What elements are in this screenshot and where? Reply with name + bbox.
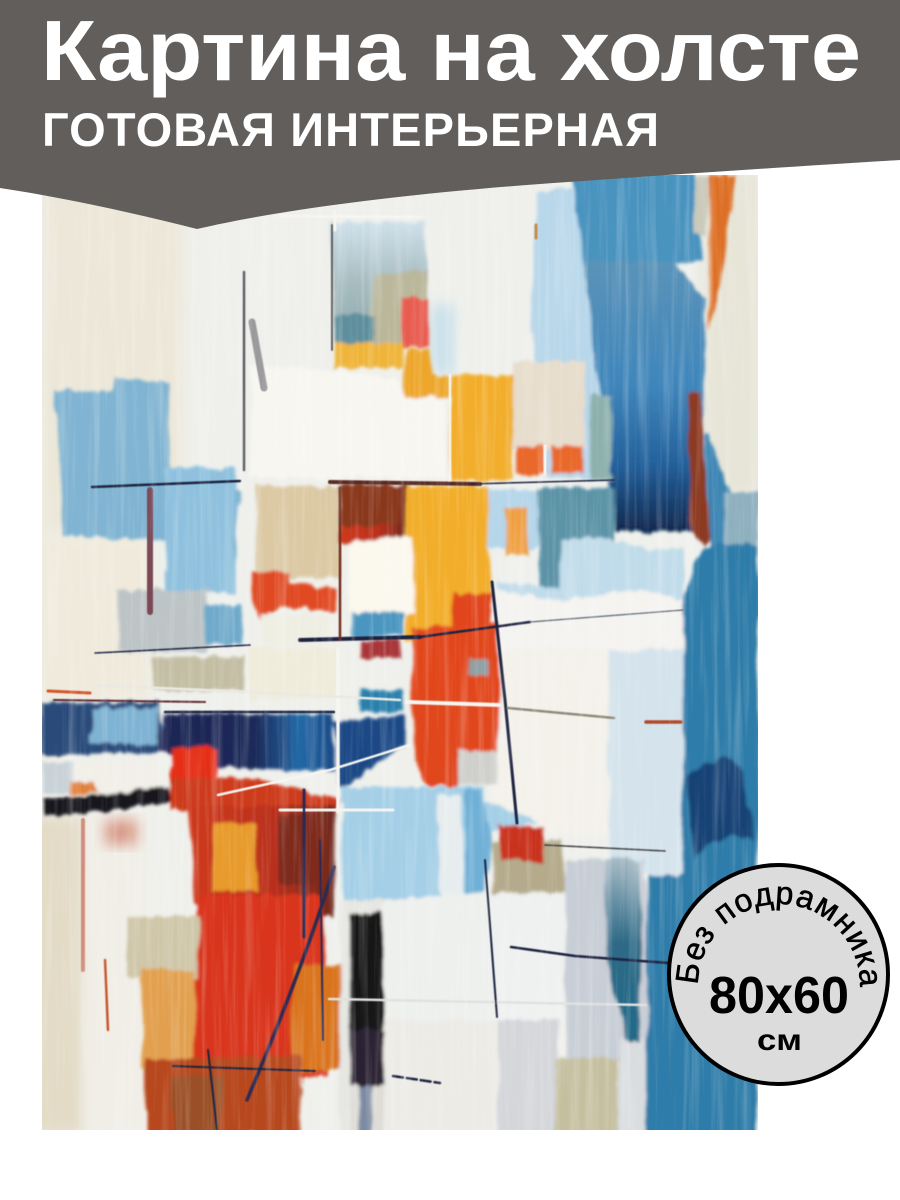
central lower blocks <box>251 485 614 640</box>
grey and red strokes <box>48 225 681 1030</box>
black vertical block <box>350 913 384 1135</box>
left grey patches <box>118 590 402 698</box>
lower right greys and teal <box>380 857 646 1135</box>
central sand and yellow <box>451 362 585 481</box>
navy horizontal band <box>42 690 404 790</box>
white scratches <box>152 219 648 1007</box>
central red block <box>412 622 499 787</box>
large white block <box>251 365 446 478</box>
right blue field <box>644 544 758 1135</box>
central pale blue block <box>340 787 540 1135</box>
subtitle: ГОТОВАЯ ИНТЕРЬЕРНАЯ <box>42 103 659 156</box>
upper right blues <box>530 172 758 550</box>
badge: size without stretcher <box>667 863 890 1086</box>
big red column <box>127 748 347 1135</box>
dark slashes <box>92 480 683 1130</box>
painted blocks <box>42 172 758 1135</box>
title: Картина на холсте <box>41 4 861 99</box>
sand patch and red square <box>492 824 568 893</box>
abstract painting <box>30 170 762 1135</box>
central upper green and red <box>332 222 450 398</box>
brush streak texture <box>42 175 758 1130</box>
left blue block <box>54 378 240 593</box>
paint lines <box>48 212 683 1130</box>
canvas base <box>30 170 762 1135</box>
pale red dab <box>105 820 137 845</box>
badge unit: см <box>757 1024 802 1057</box>
top banner <box>0 0 900 229</box>
badge curved caption: Без подрамника <box>676 886 878 988</box>
badge size: 80x60 <box>709 967 849 1025</box>
left white and black strokes <box>42 755 172 817</box>
badge circle <box>669 865 888 1084</box>
right white block <box>494 538 683 875</box>
